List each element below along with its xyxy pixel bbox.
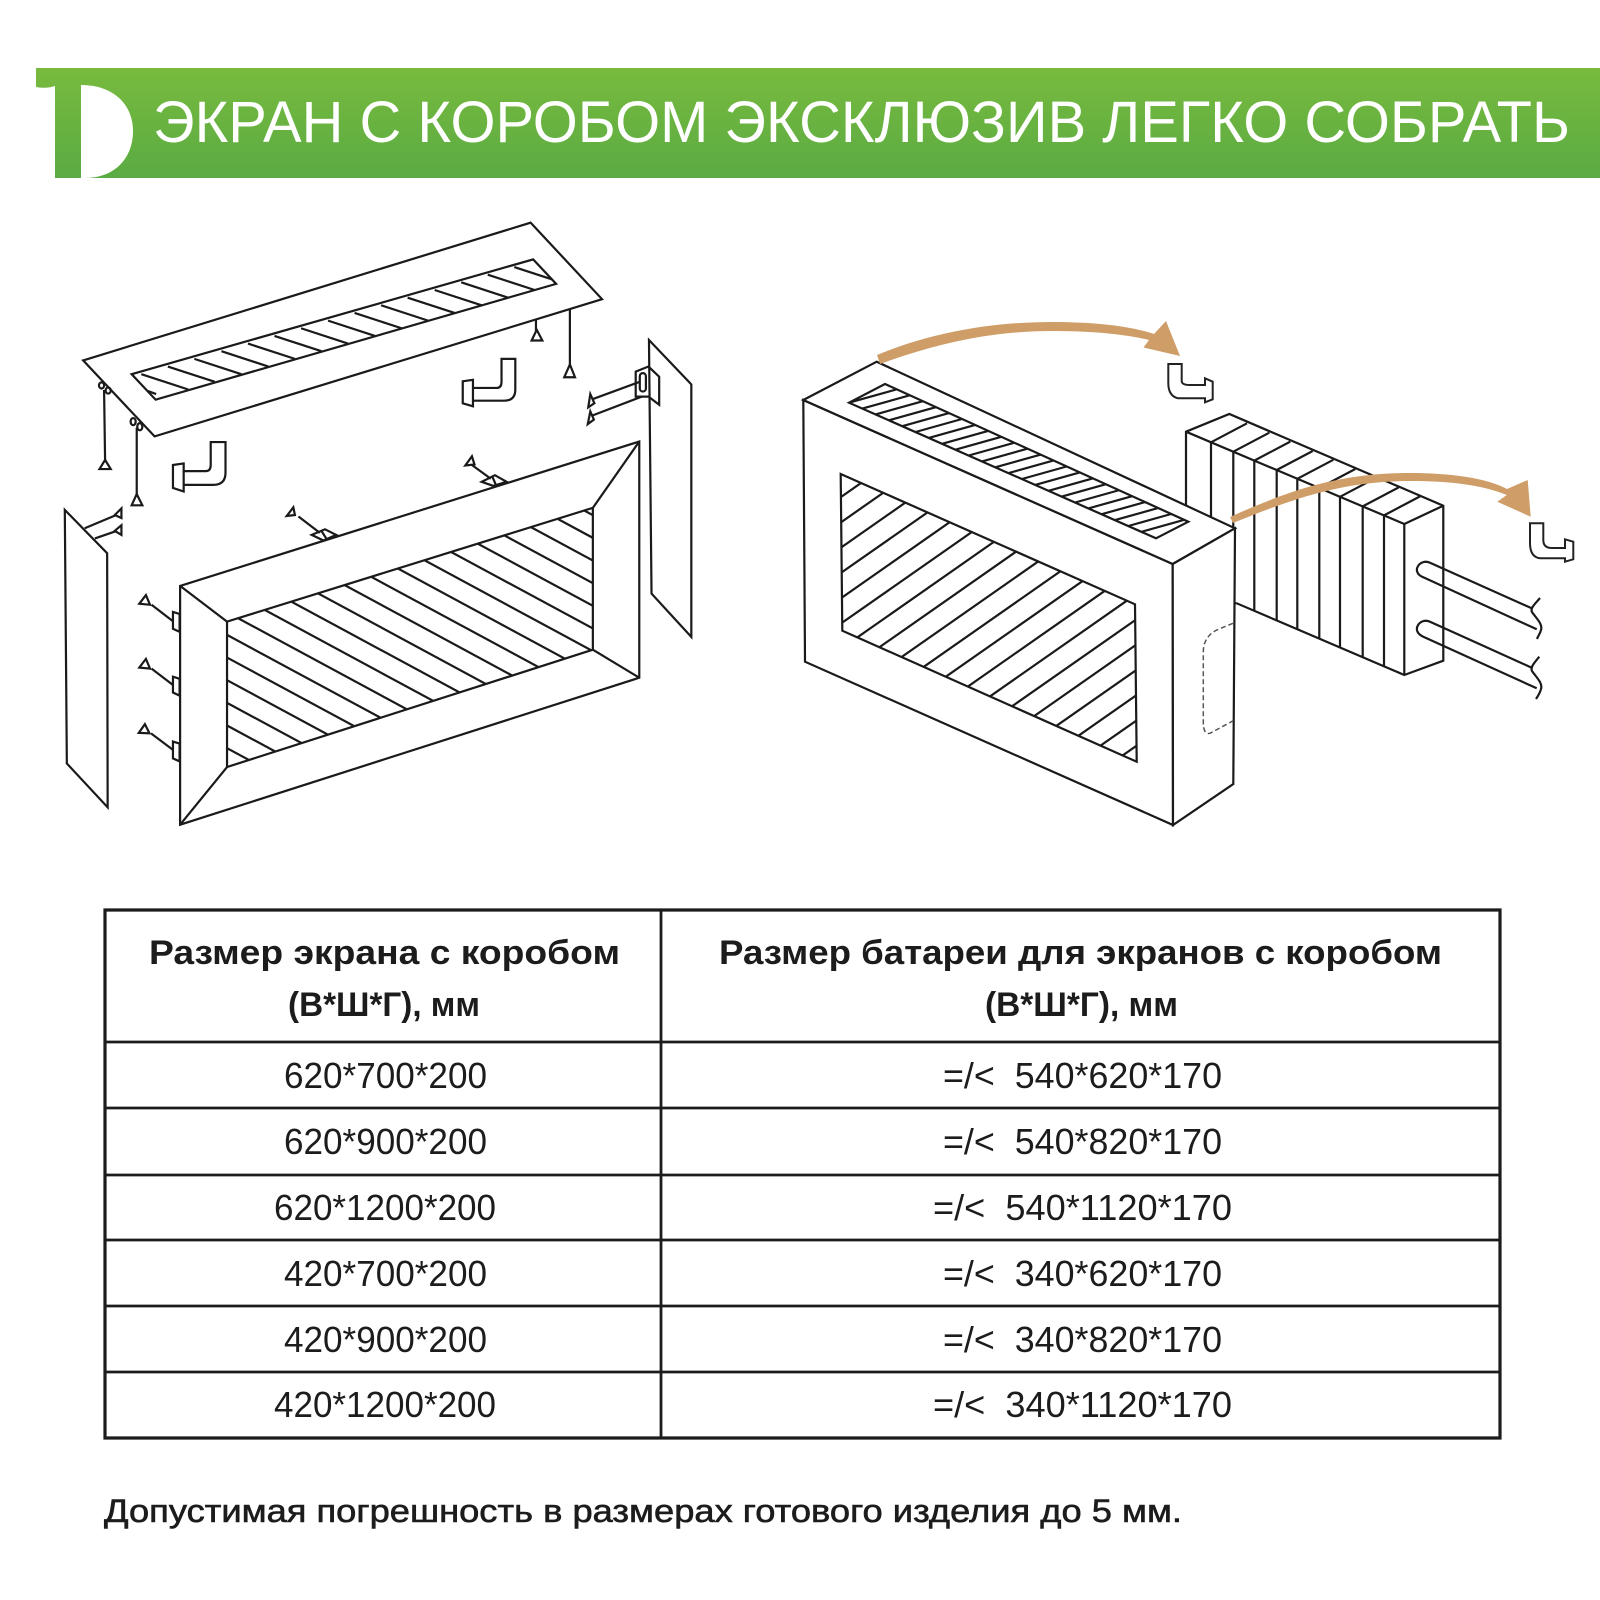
battery sizes column: =/< 540*1120*170	[933, 1187, 1232, 1228]
top slot grille	[849, 384, 1192, 538]
logo: white D	[81, 85, 133, 178]
table header left: Размер экрана с коробом	[149, 934, 620, 972]
screen sizes column: 620*900*200	[284, 1121, 487, 1162]
radiator pipes	[1417, 562, 1541, 699]
heading: ЭКРАН С КОРОБОМ ЭКСКЛЮЗИВ ЛЕГКО СОБРАТЬ	[153, 90, 1570, 155]
exploded assembly diagram	[64, 221, 692, 826]
battery sizes column	[933, 1055, 1232, 1425]
screen sizes column	[274, 1055, 496, 1425]
frame screws	[139, 456, 507, 761]
front window grille	[840, 472, 1138, 764]
screen sizes column: 420*700*200	[284, 1253, 487, 1294]
banner background with logo stem	[36, 68, 1600, 178]
table header left	[149, 934, 620, 1024]
footnote: Допустимая погрешность в размерах готового изделия до 5 мм.	[104, 1493, 1182, 1529]
battery sizes column: =/< 340*820*170	[943, 1319, 1222, 1360]
radiator battery	[1186, 414, 1443, 675]
sizes table	[105, 910, 1500, 1438]
small bracket 1	[1168, 364, 1213, 402]
left side panel	[65, 508, 121, 807]
battery sizes column: =/< 540*620*170	[943, 1055, 1222, 1096]
right side panel	[588, 340, 691, 637]
small bracket 2	[1530, 523, 1573, 562]
arrow 2	[1230, 473, 1531, 523]
title banner	[36, 68, 1600, 178]
screen sizes column: 420*900*200	[284, 1319, 487, 1360]
corner bracket right	[463, 359, 515, 406]
screen box	[800, 360, 1238, 828]
screen sizes column: 620*700*200	[284, 1055, 487, 1096]
battery sizes column: =/< 540*820*170	[943, 1121, 1222, 1162]
dashed side cut-out	[1203, 623, 1233, 733]
corner bracket left	[173, 442, 226, 492]
top panel with grille	[83, 223, 602, 436]
table header right	[719, 934, 1442, 1024]
table header right: Размер батареи для экранов с коробом	[719, 934, 1442, 972]
table header right: (В*Ш*Г), мм	[985, 986, 1178, 1024]
table grid	[105, 910, 1500, 1438]
battery sizes column: =/< 340*1120*170	[933, 1384, 1232, 1425]
screen sizes column: 620*1200*200	[274, 1187, 496, 1228]
table header left: (В*Ш*Г), мм	[288, 986, 480, 1024]
screen sizes column: 420*1200*200	[274, 1384, 496, 1425]
front frame with louvred grille	[179, 440, 640, 826]
assembled unit diagram	[800, 321, 1574, 828]
arrow 1	[877, 321, 1180, 364]
top panel screws	[99, 310, 575, 505]
battery sizes column: =/< 340*620*170	[943, 1253, 1222, 1294]
